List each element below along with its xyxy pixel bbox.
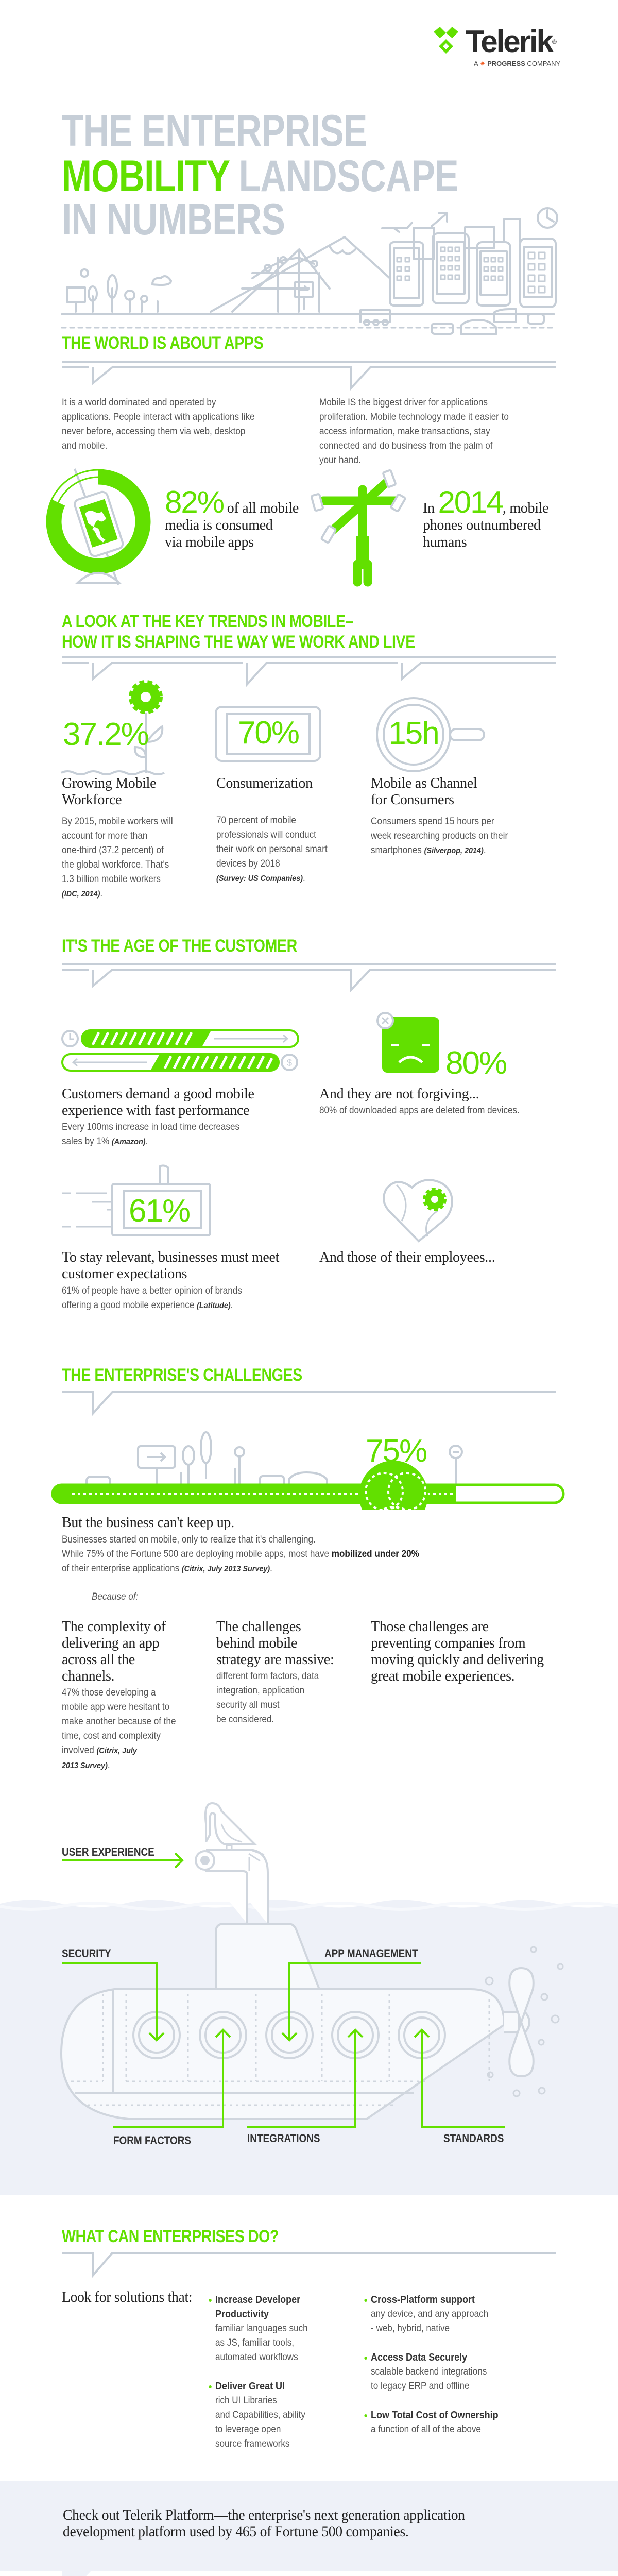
logo: Telerik: A ✷ PROGRESS COMPANY bbox=[474, 60, 560, 67]
text: apps intro: never before, accessing them via web, desktop bbox=[62, 426, 245, 437]
title: MOBILITY LANDSCAPE bbox=[62, 151, 458, 201]
heading: the world is about apps: THE WORLD IS ABOUT APPS bbox=[62, 333, 263, 353]
icon: person with phones bbox=[311, 469, 406, 586]
chart: road with knot 75% bbox=[52, 1431, 564, 1510]
text: customers demand: Customers demand a good mobile bbox=[62, 1086, 254, 1102]
text: business can't keep up: While 75% of the Fortune 500 are deploying mobile apps, most have mobilized under 20% bbox=[62, 1549, 419, 1560]
trend: mobile channel for consumers: Mobile as Channel bbox=[371, 775, 477, 791]
column: preventing companies: great mobile experiences. bbox=[371, 1668, 514, 1684]
logo: Telerik bbox=[434, 24, 560, 67]
column: challenges massive: security all must bbox=[216, 1700, 280, 1710]
icon: heart with gear bbox=[383, 1179, 453, 1243]
stat: 2014: humans bbox=[423, 534, 467, 550]
list: solutions column 1: Productivity bbox=[215, 2309, 269, 2320]
column: preventing companies: moving quickly and delivering bbox=[371, 1652, 544, 1668]
label: user experience: USER EXPERIENCE bbox=[62, 1845, 154, 1858]
list: solutions column 2: Access Data Securely bbox=[371, 2352, 467, 2363]
icon: telerik mark bbox=[434, 27, 458, 54]
label: security: SECURITY bbox=[62, 1947, 111, 1960]
text: apps intro bbox=[62, 397, 255, 451]
text: customers demand: sales by 1% (Amazon). bbox=[62, 1136, 148, 1147]
list: solutions column 1: as JS, familiar tools, bbox=[215, 2337, 294, 2348]
text: business can't keep up: Businesses started on mobile, only to realize that it's challenging. bbox=[62, 1534, 316, 1545]
icon: flower gear bbox=[61, 680, 165, 775]
icon: donut 82% globe phone bbox=[46, 468, 150, 585]
text: because of: Because of: bbox=[92, 1591, 138, 1602]
trend: mobile channel for consumers: Consumers spend 15 hours per bbox=[371, 816, 494, 827]
trend: growing mobile workforce: account for more than bbox=[62, 831, 147, 841]
list: solutions column 2: scalable backend integrations bbox=[371, 2366, 487, 2377]
list: solutions column 1: source frameworks bbox=[215, 2438, 289, 2449]
list: solutions column 1: Deliver Great UI bbox=[215, 2381, 285, 2392]
icon: performance bars: $ bbox=[287, 1058, 292, 1068]
column: complexity: time, cost and complexity bbox=[62, 1731, 161, 1741]
icon: landscape phone 70%: 70% bbox=[238, 715, 299, 751]
icon: thumbs up 61%: 61% bbox=[129, 1193, 190, 1229]
trend: growing mobile workforce: By 2015, mobile workers will bbox=[62, 816, 173, 827]
text: not forgiving: 80% of downloaded apps are deleted from devices. bbox=[319, 1105, 520, 1116]
label: integrations: INTEGRATIONS bbox=[247, 2132, 320, 2145]
icon: sad app bbox=[376, 1012, 439, 1073]
label: form factors: FORM FACTORS bbox=[113, 2134, 191, 2147]
trend: consumerization: devices by 2018 bbox=[216, 858, 280, 869]
stat: 82%: 82% of all mobile bbox=[165, 485, 299, 519]
column: preventing companies: Those challenges are bbox=[371, 1619, 489, 1635]
heading: key trends bbox=[62, 612, 415, 652]
speech bubble divider bbox=[62, 1391, 556, 1416]
stat: 75%: 75% bbox=[366, 1433, 426, 1469]
trend: consumerization: (Survey: US Companies). bbox=[216, 873, 305, 884]
trend: mobile channel for consumers: smartphones (Silverpop, 2014). bbox=[371, 845, 486, 856]
column: challenges massive: be considered. bbox=[216, 1714, 274, 1725]
trend: growing mobile workforce: Workforce bbox=[62, 792, 122, 808]
text: customers demand: experience with fast performance bbox=[62, 1103, 249, 1118]
column: challenges massive: The challenges bbox=[216, 1619, 301, 1635]
trend: growing mobile workforce: one-third (37.2 percent) of bbox=[62, 845, 164, 856]
stat: 80%: 80% bbox=[445, 1045, 506, 1081]
trend: mobile channel for consumers: week researching products on their bbox=[371, 831, 508, 841]
list: solutions column 1: familiar languages such bbox=[215, 2323, 308, 2334]
speech bubble divider bbox=[62, 2252, 556, 2278]
list: solutions column 1: and Capabilities, ability bbox=[215, 2410, 305, 2420]
speech bubble divider bbox=[62, 656, 556, 687]
list: solutions column 2: a function of all of the above bbox=[371, 2424, 481, 2435]
text: stay relevant: To stay relevant, businesses must meet bbox=[62, 1249, 279, 1265]
icon: thumbs up 61% bbox=[62, 1164, 211, 1236]
trend: mobile channel for consumers: for Consumers bbox=[371, 792, 454, 808]
icon: landscape phone 70% bbox=[215, 706, 321, 762]
column: challenges massive: behind mobile bbox=[216, 1635, 297, 1651]
speech bubble divider bbox=[62, 963, 556, 993]
text: mobile driver bbox=[319, 397, 509, 466]
trend: growing mobile workforce: the global workforce. That's bbox=[62, 859, 169, 870]
column: complexity bbox=[62, 1619, 176, 1771]
text: business can't keep up: But the business can't keep up. bbox=[62, 1515, 234, 1531]
logo: Telerik: Telerik® bbox=[466, 24, 557, 59]
column: complexity: delivering an app bbox=[62, 1635, 159, 1651]
column: complexity: make another because of the bbox=[62, 1716, 176, 1727]
text: stay relevant: offering a good mobile experience (Latitude). bbox=[62, 1300, 233, 1311]
text: apps intro: and mobile. bbox=[62, 440, 107, 451]
list: solutions column 1: automated workflows bbox=[215, 2352, 298, 2363]
column: complexity: 47% those developing a bbox=[62, 1687, 156, 1698]
trend: consumerization: their work on personal smart bbox=[216, 844, 328, 855]
text: business can't keep up bbox=[62, 1515, 419, 1574]
trend: consumerization bbox=[216, 775, 328, 884]
column: complexity: involved (Citrix, July bbox=[62, 1745, 137, 1756]
trend: growing mobile workforce: Growing Mobile bbox=[62, 775, 156, 791]
stat: 82% bbox=[165, 485, 299, 550]
title: THE ENTERPRISE bbox=[62, 106, 367, 156]
trend: growing mobile workforce: 1.3 billion mobile workers bbox=[62, 874, 161, 885]
title bbox=[62, 106, 458, 244]
list: solutions column 2: Low Total Cost of Ownership bbox=[371, 2410, 499, 2421]
text: apps intro: It is a world dominated and operated by bbox=[62, 397, 216, 408]
callout: telerik platform: Check out Telerik Platform—the enterprise's next generation application bbox=[63, 2506, 465, 2523]
column: complexity: channels. bbox=[62, 1668, 114, 1684]
text: not forgiving bbox=[319, 1086, 520, 1116]
heading: age of the customer: IT'S THE AGE OF THE CUSTOMER bbox=[62, 936, 297, 956]
callout: telerik platform bbox=[0, 2481, 618, 2576]
stat: 82%: via mobile apps bbox=[165, 534, 254, 550]
column: preventing companies: preventing companies from bbox=[371, 1635, 525, 1651]
column: challenges massive: strategy are massive: bbox=[216, 1652, 334, 1668]
text: mobile driver: connected and do business from the palm of bbox=[319, 440, 493, 451]
text: mobile driver: your hand. bbox=[319, 455, 361, 466]
text: apps intro: applications. People interact with applications like bbox=[62, 412, 255, 422]
stat: 2014: phones outnumbered bbox=[423, 517, 541, 533]
trend: growing mobile workforce bbox=[62, 775, 173, 899]
text: not forgiving: And they are not forgiving... bbox=[319, 1086, 479, 1102]
list: solutions column 2: - web, hybrid, native bbox=[371, 2323, 450, 2334]
heading: key trends: A LOOK AT THE KEY TRENDS IN MOBILE– bbox=[62, 612, 353, 631]
heading: what can enterprises do: WHAT CAN ENTERPRISES DO? bbox=[62, 2227, 279, 2246]
stat: 2014: In 2014, mobile bbox=[423, 485, 548, 519]
list: solutions column 1: rich UI Libraries bbox=[215, 2395, 277, 2406]
trend: mobile channel for consumers bbox=[371, 775, 508, 856]
label: standards: STANDARDS bbox=[443, 2132, 504, 2145]
illustration: city landscape bbox=[61, 207, 558, 335]
trend: consumerization: 70 percent of mobile bbox=[216, 815, 296, 826]
column: challenges massive: different form factors, data bbox=[216, 1671, 319, 1682]
title: IN NUMBERS bbox=[62, 195, 285, 244]
column: complexity: The complexity of bbox=[62, 1619, 166, 1635]
column: complexity: mobile app were hesitant to bbox=[62, 1702, 169, 1713]
heading: key trends: HOW IT IS SHAPING THE WAY WE WORK AND LIVE bbox=[62, 632, 415, 652]
list: solutions column 2: to legacy ERP and offline bbox=[371, 2381, 469, 2392]
icon: magnifier 15h bbox=[376, 697, 485, 772]
list: solutions column 2: any device, and any approach bbox=[371, 2309, 488, 2319]
list: solutions column 1 bbox=[209, 2294, 308, 2449]
text: look for solutions: Look for solutions that: bbox=[62, 2289, 192, 2306]
text: mobile driver: access information, make transactions, stay bbox=[319, 426, 490, 437]
speech bubble divider bbox=[62, 361, 556, 391]
icon: performance bars bbox=[61, 1029, 299, 1072]
column: challenges massive bbox=[216, 1619, 334, 1725]
text: business can't keep up: of their enterprise applications (Citrix, July 2013 Survey). bbox=[62, 1563, 272, 1574]
list: solutions column 2: Cross-Platform support bbox=[371, 2294, 475, 2306]
text: stay relevant: 61% of people have a better opinion of brands bbox=[62, 1285, 242, 1296]
text: mobile driver: Mobile IS the biggest driver for applications bbox=[319, 397, 488, 408]
column: complexity: 2013 Survey). bbox=[62, 1760, 110, 1771]
illustration: submarine bbox=[0, 1802, 618, 2195]
list: solutions column 2 bbox=[364, 2294, 499, 2435]
text: customers demand bbox=[62, 1086, 254, 1147]
icon: magnifier 15h: 15h bbox=[388, 716, 439, 751]
text: stay relevant: customer expectations bbox=[62, 1266, 187, 1282]
trend: growing mobile workforce: (IDC, 2014). bbox=[62, 888, 102, 899]
trend: consumerization: professionals will conduct bbox=[216, 829, 316, 840]
text: employees: And those of their employees... bbox=[319, 1249, 495, 1265]
stat: 82%: media is consumed bbox=[165, 517, 273, 533]
list: solutions column 1: Increase Developer bbox=[215, 2294, 300, 2306]
label: app management: APP MANAGEMENT bbox=[324, 1947, 418, 1960]
text: mobile driver: proliferation. Mobile technology made it easier to bbox=[319, 412, 509, 422]
heading: enterprise challenges: THE ENTERPRISE'S CHALLENGES bbox=[62, 1365, 302, 1385]
list: solutions column 1: to leverage open bbox=[215, 2424, 281, 2435]
stat: 37.2%: 37.2% bbox=[63, 717, 148, 752]
trend: consumerization: Consumerization bbox=[216, 775, 313, 791]
stat: 2014 bbox=[423, 485, 548, 550]
callout: telerik platform: development platform used by 465 of Fortune 500 companies. bbox=[63, 2523, 409, 2540]
text: stay relevant bbox=[62, 1249, 279, 1311]
column: complexity: across all the bbox=[62, 1652, 135, 1668]
column: challenges massive: integration, application bbox=[216, 1685, 304, 1696]
column: preventing companies bbox=[371, 1619, 544, 1684]
text: customers demand: Every 100ms increase in load time decreases bbox=[62, 1122, 239, 1132]
